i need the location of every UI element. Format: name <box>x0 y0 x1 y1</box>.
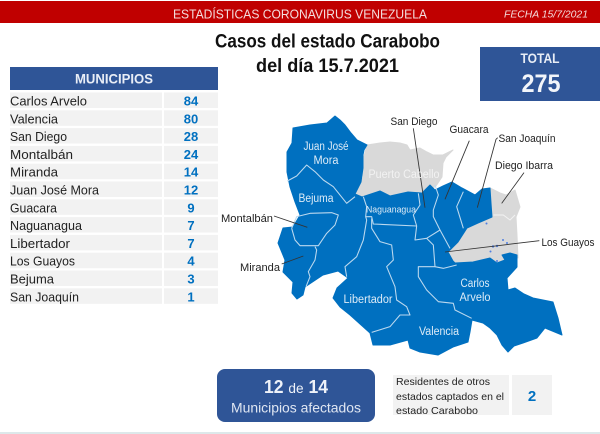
table rows: San Joaquín <box>10 289 79 304</box>
map labels outside: Montalbán <box>221 213 273 225</box>
table rows: Carlos Arvelo <box>10 94 87 108</box>
table rows: Juan José Mora <box>10 182 100 198</box>
grey area: Puerto Cabello <box>355 142 453 197</box>
grey area: Diego Ibarra and Los Guayos <box>448 188 520 263</box>
map labels inside: Mora <box>314 155 339 167</box>
table rows: 12 <box>184 182 198 198</box>
callout: residentes de otros estados: estado Carabobo <box>396 405 478 417</box>
table rows: 4 <box>187 254 195 269</box>
table rows <box>10 92 218 304</box>
table rows: Los Guayos <box>10 254 75 269</box>
map labels inside: Valencia <box>419 326 460 338</box>
table rows: 80 <box>184 111 198 126</box>
table: municipios <box>10 67 218 304</box>
callout: municipios afectados: 12 de 14 <box>264 377 328 397</box>
map labels outside: Diego Ibarra <box>495 160 554 172</box>
map labels inside: Arvelo <box>460 292 490 304</box>
table header <box>10 67 218 90</box>
table header: MUNICIPIOS <box>75 72 153 86</box>
map labels inside: Naguanagua <box>366 204 417 216</box>
map labels outside: Miranda <box>240 262 281 274</box>
table rows: Bejuma <box>10 272 55 286</box>
table rows: 14 <box>184 165 199 180</box>
table rows: 1 <box>187 289 195 304</box>
table rows: Libertador <box>10 236 71 251</box>
callout: residentes de otros estados: estados captados en el <box>396 391 504 403</box>
table rows: Valencia <box>10 111 59 126</box>
map labels inside: Puerto Cabello <box>368 169 440 181</box>
table rows: 9 <box>187 200 195 215</box>
callout: residentes de otros estados: Residentes de otros <box>396 376 490 388</box>
map labels inside: Bejuma <box>298 193 334 205</box>
map labels outside <box>221 116 595 274</box>
callout: municipios afectados: Municipios afectados <box>231 400 361 416</box>
total box: 275 <box>522 70 561 98</box>
title: Casos del estado Carabobo <box>215 32 440 52</box>
map labels outside: San Joaquín <box>498 133 556 145</box>
table rows: 3 <box>187 272 195 286</box>
callout: residentes de otros estados <box>393 375 552 417</box>
municipal boundaries <box>287 165 515 332</box>
table rows: 28 <box>184 129 198 144</box>
callout: municipios afectados <box>217 369 375 422</box>
map labels outside: Los Guayos <box>542 237 595 249</box>
callout: residentes de otros estados: 2 <box>528 388 536 405</box>
table rows: 7 <box>187 236 195 251</box>
total box <box>480 47 600 101</box>
map labels inside: Carlos <box>460 278 490 290</box>
header bar: ESTADÍSTICAS CORONAVIRUS VENEZUELA <box>173 6 427 22</box>
map labels outside: Guacara <box>450 124 489 136</box>
map: Carabobo municipalities <box>221 116 595 355</box>
map labels inside: Libertador <box>344 294 393 306</box>
title: del día 15.7.2021 <box>256 56 399 77</box>
total box: TOTAL <box>520 50 560 66</box>
table rows: 7 <box>187 218 195 233</box>
table rows: Montalbán <box>10 147 73 162</box>
table rows: Guacara <box>10 200 58 215</box>
table rows: 84 <box>184 94 199 108</box>
table rows: San Diego <box>10 129 67 144</box>
Los Guayos infected points <box>486 222 508 262</box>
map labels inside: Juan José <box>304 141 348 153</box>
table rows: Miranda <box>10 165 59 180</box>
map labels outside: San Diego <box>390 116 438 128</box>
header bar <box>0 1 600 23</box>
blue area: affected municipalities <box>278 116 562 355</box>
table rows: 24 <box>184 147 199 162</box>
leader lines <box>274 128 539 264</box>
table rows: Naguanagua <box>10 218 83 233</box>
map labels inside <box>298 141 490 338</box>
header bar: FECHA 15/7/2021 <box>504 8 588 20</box>
title <box>215 32 440 77</box>
